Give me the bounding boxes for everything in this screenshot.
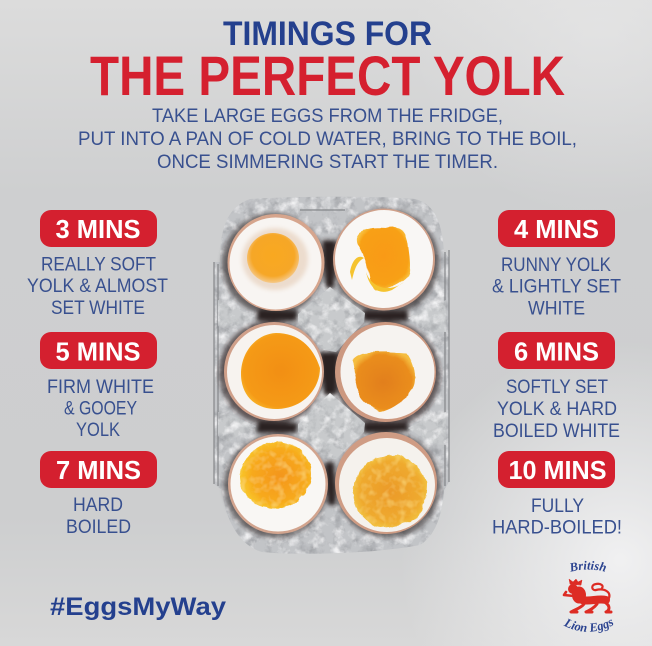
badge: 4 mins: 4 MINS bbox=[514, 216, 599, 244]
badge: 3 mins: 3 MINS bbox=[56, 216, 140, 244]
intro text: ONCE SIMMERING START THE TIMER. bbox=[157, 152, 498, 173]
egg: 6 mins bbox=[335, 322, 436, 422]
logo text: British: British bbox=[570, 560, 606, 572]
description: 10 mins bbox=[492, 496, 622, 538]
intro text: TAKE LARGE EGGS FROM THE FRIDGE, bbox=[152, 106, 503, 127]
description: 6 mins: BOILED WHITE bbox=[493, 421, 620, 442]
timing: 7 mins bbox=[40, 451, 157, 538]
description: 3 mins: SET WHITE bbox=[51, 298, 145, 319]
timing: 6 mins bbox=[493, 332, 620, 442]
description: 5 mins: YOLK bbox=[76, 420, 120, 441]
icon: red lion bbox=[564, 579, 611, 612]
egg: 5 mins bbox=[224, 322, 324, 421]
description: 3 mins bbox=[27, 254, 168, 319]
description: 5 mins: & GOOEY bbox=[64, 398, 137, 420]
egg: 7 mins bbox=[228, 434, 328, 534]
British Lion Eggs logo bbox=[562, 560, 614, 633]
timing: 5 mins bbox=[40, 332, 157, 441]
timing: 4 mins bbox=[492, 210, 621, 320]
title line: timings for: TIMINGS FOR bbox=[223, 15, 432, 53]
badge: 6 mins: 6 MINS bbox=[514, 338, 599, 366]
logo text: Lion Eggs: Lion Eggs bbox=[564, 618, 614, 633]
intro text bbox=[78, 106, 577, 173]
description: 4 mins bbox=[492, 255, 621, 320]
carton centre cones bbox=[218, 287, 446, 459]
carton shadows between eggs bbox=[219, 209, 441, 538]
description: 7 mins: HARD bbox=[73, 495, 123, 516]
description: 5 mins: FIRM WHITE bbox=[47, 377, 154, 398]
description: 4 mins: RUNNY YOLK bbox=[501, 255, 611, 276]
carton tray bbox=[214, 197, 449, 554]
timing: 3 mins bbox=[27, 210, 168, 319]
description: 4 mins: & LIGHTLY SET bbox=[492, 276, 621, 298]
title line: the perfect yolk: THE PERFECT YOLK bbox=[90, 44, 565, 107]
egg: 10 mins bbox=[335, 432, 437, 534]
badge: 3 mins bbox=[40, 210, 157, 247]
badge: 7 mins: 7 MINS bbox=[56, 457, 141, 485]
description: 3 mins: REALLY SOFT bbox=[41, 254, 156, 276]
description: 7 mins: BOILED bbox=[66, 517, 131, 538]
intro text: PUT INTO A PAN OF COLD WATER, BRING TO THE BOIL, bbox=[78, 129, 577, 150]
description: 5 mins bbox=[47, 377, 154, 441]
description: 6 mins: SOFTLY SET bbox=[506, 377, 608, 398]
egg: 3 mins bbox=[228, 214, 324, 311]
description: 3 mins: YOLK & ALMOST bbox=[27, 276, 168, 297]
timing: 10 mins bbox=[492, 451, 622, 538]
egg: 4 mins bbox=[333, 208, 435, 310]
description: 7 mins bbox=[66, 495, 131, 538]
description: 10 mins: HARD-BOILED! bbox=[492, 518, 622, 538]
title bbox=[90, 15, 565, 107]
badge: 5 mins: 5 MINS bbox=[56, 338, 140, 366]
description: 4 mins: WHITE bbox=[528, 298, 585, 320]
description: 6 mins: YOLK & HARD bbox=[497, 399, 617, 420]
egg carton with six eggs bbox=[214, 197, 449, 554]
description: 6 mins bbox=[493, 377, 620, 442]
badge: 10 mins: 10 MINS bbox=[508, 457, 606, 485]
description: 10 mins: FULLY bbox=[531, 496, 584, 517]
hashtag: #EggsMyWay bbox=[50, 593, 226, 621]
